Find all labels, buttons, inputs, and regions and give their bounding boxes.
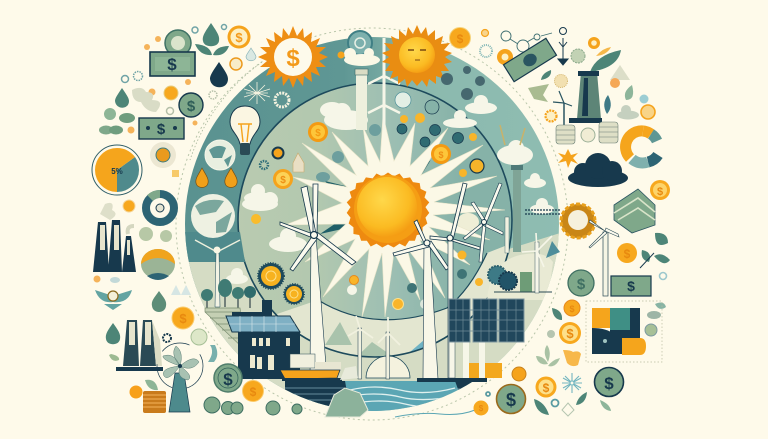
icon: small turbine right [553,91,572,130]
icon: orange leaf [596,47,611,56]
icon: green drop [106,323,120,344]
icon: pale drop [246,48,256,61]
far wind turbine [463,183,509,262]
center wind turbine [393,220,449,379]
icon: beige blob [132,88,160,112]
icon: pale green gear [571,49,585,63]
icon: bill right [611,276,651,296]
icon: orange small coin [123,200,135,212]
icon: ring token [581,128,595,142]
icon: grid orange [172,170,179,177]
sun star rays [285,115,505,317]
icon: small orange dot and cloud [94,276,120,283]
icon: gold coin lower right [617,243,637,263]
small orange dots left [128,36,198,134]
coin: inner left [273,169,293,189]
icon: dark cloud [568,153,628,187]
dark token group [395,92,464,147]
icon: top teal drop [203,23,219,46]
icon: right oil drop [225,168,237,188]
icon: white gear [275,93,289,107]
icon: orange coin bottom-left [474,400,488,416]
icon: green floral [536,345,560,366]
icon: orange coin bottom [512,367,526,381]
icon: green dollar coin [179,93,203,117]
icon: second factories [116,320,163,371]
house with solar roof [226,300,300,379]
icon: orange coin lower: $ [179,311,187,326]
icon: coin and stack [130,386,166,413]
cooling tower in ring [511,165,560,252]
icon: leaf on chimney [590,50,621,72]
icon: lower-left wind turbine [195,240,240,307]
panel: lower-right land [487,254,553,300]
icon: orange coin lower right: $ [250,385,257,399]
icon: tilted bill [503,38,557,82]
icon: right chimney [569,71,602,123]
icon: green drop lower [152,291,166,312]
coin: inner upper: $ [315,128,321,139]
icon: orange coin small [164,86,178,100]
icon: teal sun line [480,45,492,57]
icon: green leaf [552,308,562,320]
icon: big green dollar coin [496,384,526,414]
clouds [226,95,554,284]
icon: pale leaf [109,354,119,361]
icon: orange coin [228,26,250,48]
coin: inner right [431,144,451,164]
coin: small [459,169,467,177]
icon: teal drop left [115,88,129,108]
icon: bottom leaves [534,392,611,415]
icon: twin leaves [195,44,229,55]
icon: right turbine [589,220,619,296]
cloud with lightning [497,125,533,165]
panel: lower hills [276,246,507,356]
small land turbine [522,233,560,293]
trees [201,279,256,308]
icon: orange gear top [482,30,488,36]
icon: smiling sun face [382,25,452,87]
coin: inner upper [308,122,328,142]
icon: stack right [599,122,618,143]
water [290,381,472,411]
central sun [347,173,429,247]
icon: orange coin lower right [242,380,264,402]
icon: teal swirl [208,345,217,362]
icon: left oil drop [196,168,208,188]
icon: orange ring gear [497,49,513,65]
icon: big green dollar coin: $ [506,390,516,410]
icon: green dollar coin: $ [187,98,196,115]
coin: dark rim [470,159,484,173]
icon: blue dot [640,94,648,104]
icon: green dollar coin right [568,270,594,296]
icon: beige leaves [139,227,172,242]
icon: diamond grid [562,403,574,416]
icon: bill right: $ [627,278,635,294]
icon: orange coin: $ [569,304,575,314]
patterned gear cluster [441,66,485,100]
icon: top turbine [368,38,400,130]
icon: top-left dollar bill: $ [167,55,177,74]
icon: beige mountain [610,65,630,80]
icon: top-left dollar bill [150,52,195,76]
rays behind the sun [320,152,455,279]
icon: orange sun right [641,105,655,119]
dashed outer ring [176,28,568,420]
gauge dome [366,356,410,378]
icon: gear grey [547,330,555,338]
coins below the sun [347,250,467,310]
chart: teal donut [146,194,174,222]
icon: large globe [191,194,235,238]
icon: gold coin right: $ [657,186,663,198]
icon: dollar sun [258,26,328,88]
icon: lightbulb [230,106,260,155]
ring suns [258,263,304,304]
coin: pair small [400,113,425,123]
icon: money stack [614,189,655,233]
icon: orange coin lower [172,307,194,329]
boat [280,354,342,381]
icon: gold ring dollar coin: $ [566,326,574,341]
icon: gold dollar coin bottom [536,376,556,398]
right wind turbine [430,183,480,378]
icon: left factories [93,220,136,272]
icon: green coin pair [99,108,135,134]
icon: gold dollar coin bottom: $ [543,381,550,395]
icon: leaf [145,380,158,390]
coin: inner right: $ [438,150,444,160]
icon: green dollar coin with navy rim: $ [604,374,614,393]
small wind turbines by the water [348,316,400,379]
icon: pale green coin [191,329,207,345]
coin: bottom of ring [251,214,261,224]
icon: pale smoke [100,203,116,220]
icon: network [501,31,552,52]
icon: teal leaf [541,70,551,80]
icon: arrow [558,28,568,65]
icon: second dollar bill: $ [157,121,166,138]
icon: dollar sun: $ [286,45,300,72]
icon: orange coin: $ [235,30,243,45]
teal patches inside inner circle [316,124,381,182]
icon: gold coin right [650,180,670,200]
iceberg beside boat [340,366,358,380]
icon: orange coin bottom-left: $ [479,404,484,413]
icon: gold coin lower right: $ [624,247,631,261]
icon: green coin top left [165,30,191,56]
icon: orange coin [564,300,580,316]
icon: lower green coins [204,397,302,415]
icon: orange star [558,149,578,168]
icon: sun blotch [150,142,176,168]
icon: ship skyline [171,285,191,295]
icon: green dollar coin lower [214,364,242,392]
icon: beige flower [554,74,568,88]
icon: orange sprite [610,78,620,88]
solar panels [417,299,524,382]
icon: teal snowflake [562,373,582,393]
small teal gears left [122,24,226,82]
chart: investment gauge: 5% [111,167,123,176]
icon: winged emblem [95,290,132,310]
icon: ring coin [230,58,242,70]
coin: inner left: $ [280,175,286,186]
icon: pale gear [660,272,666,280]
panel: tiled square [586,301,662,362]
ground stripes [205,308,245,350]
icon: green dollar coin right: $ [577,276,586,293]
icon: gear with clock [561,204,595,238]
infographic canvas [92,23,670,420]
icon: orange coin top right: $ [457,32,464,46]
icon: green dollar coin with navy rim [594,368,624,396]
icon: cloud grey [617,105,639,120]
icon: second dollar bill [139,118,184,139]
gears on land [475,266,552,292]
panel: lower land of outer ring [189,234,558,411]
icon: stack left [556,125,575,144]
icon: dark oil drop [210,62,228,87]
chart: investment gauge [92,145,142,195]
panel: lower-left teal band [184,232,245,262]
icon: pale coins right [645,311,661,336]
icon: orange coin top right [450,28,470,48]
icon: upward arrow [293,153,304,172]
top-left dotted arc [190,62,262,160]
icon: leaf near teal [655,303,666,309]
icon: teal leaf pair right [604,85,633,114]
icon: orange crest [563,350,581,366]
rock [325,388,368,417]
icon: beige gears [166,91,217,114]
coin: small upper right [469,133,477,141]
icon: small gear dark [272,148,284,158]
chart: segmented donut [626,131,658,163]
arc of hill boundary [318,253,487,320]
icon: sunburst line [244,82,270,104]
chart: round orange and green disc [141,249,175,280]
icon: green dollar coin lower: $ [223,370,233,389]
icon: orange sun left [546,110,556,122]
panel: inner circle [238,84,511,356]
icon: recycled star [528,84,549,102]
icon: orange gear right [588,37,600,49]
icon: pinwheel turbine [157,343,203,412]
icon: gear white [260,161,268,169]
river line [395,410,475,417]
icon: gold ring dollar coin [559,322,581,344]
big wind turbine left [280,184,356,379]
icon: small ring [163,334,171,342]
icon: small globe [205,140,235,170]
icon: teal ring [486,392,558,406]
icon: leaf branch [640,233,670,268]
icon: chimney and cloud at top [338,31,380,130]
panel: central disc [180,30,570,420]
